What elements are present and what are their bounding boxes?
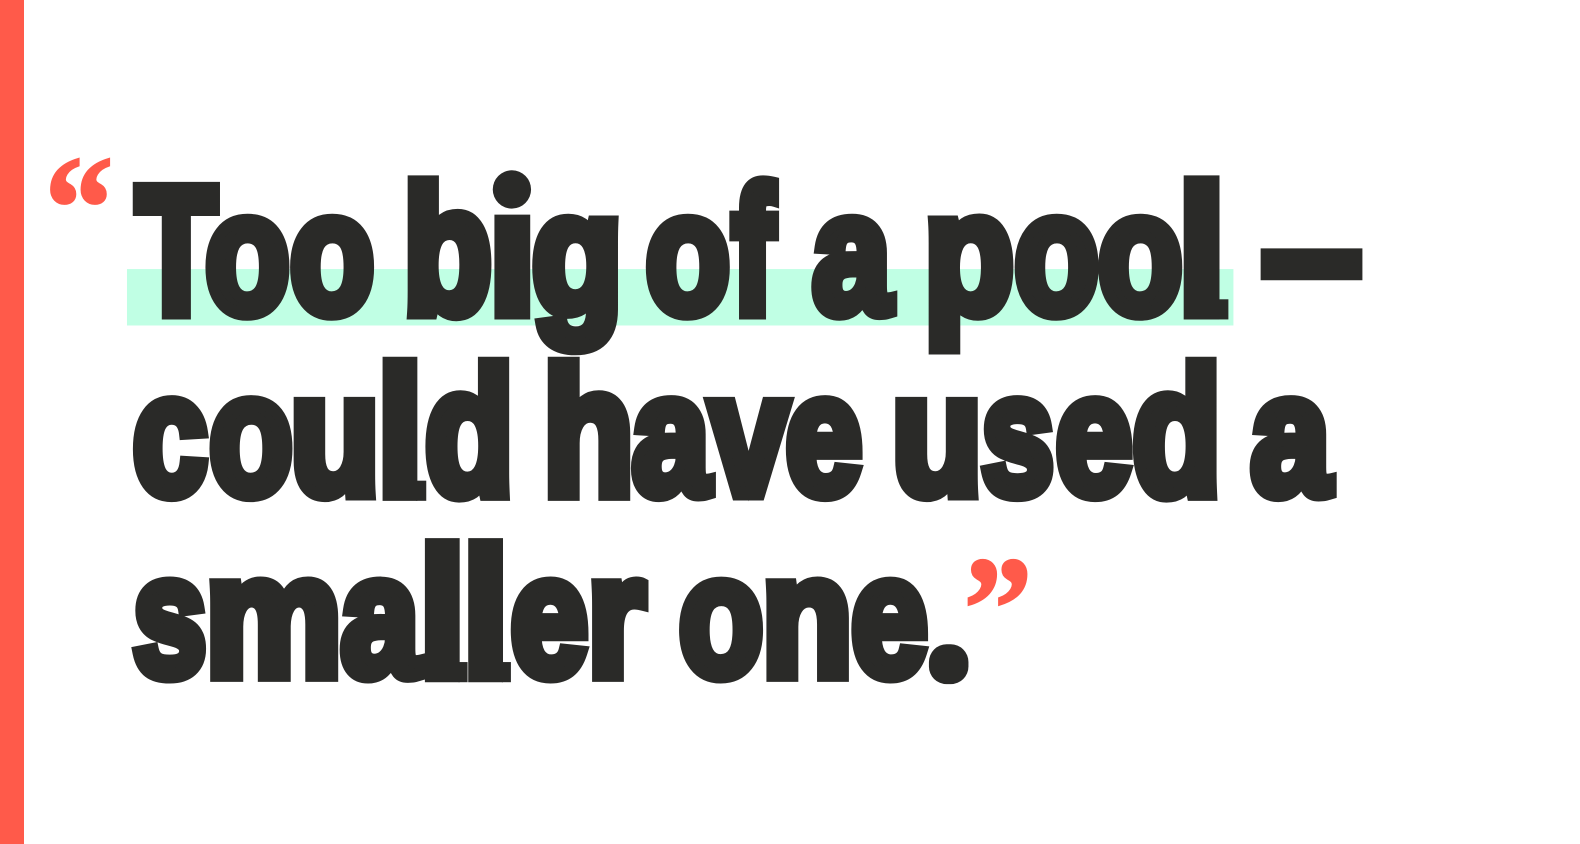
quote line 1: p [924, 158, 1014, 349]
quote line 3: r [588, 521, 645, 712]
quote line 1: o [1098, 158, 1182, 349]
quote line 2: l [378, 333, 422, 533]
quote line 2: e [1056, 339, 1132, 530]
quote line 1: — [1264, 151, 1359, 351]
quote line 1: b [403, 150, 492, 351]
quote line 2: a [1251, 341, 1332, 531]
quote line 3: m [206, 521, 342, 712]
quote line 1: a [813, 158, 892, 350]
quote line 1 [136, 150, 1359, 351]
quote line 1: f [732, 150, 774, 351]
quote line 1: o [290, 158, 374, 349]
quote line 3: o [679, 521, 763, 712]
quote line 1: T [136, 151, 216, 351]
quote line 3: n [762, 520, 852, 712]
quote line 2: c [133, 340, 207, 531]
quote line 3: s [133, 522, 206, 712]
opening quotation mark: “ [44, 126, 114, 291]
quote line 3: l [420, 514, 465, 714]
quote line 1: g [532, 158, 623, 349]
quote line 1: o [205, 158, 289, 349]
quote line 2: u [290, 339, 380, 530]
quote line 2 [133, 331, 1332, 533]
quote line 1: o [1015, 158, 1099, 349]
quote line 3: . [945, 641, 953, 674]
quote line 3: a [341, 521, 420, 712]
quote line 2: e [786, 339, 862, 530]
quote line 3: l [463, 514, 508, 714]
quote line 2: d [1133, 331, 1221, 532]
quote line 1: l [1179, 150, 1225, 351]
quote line 2: u [892, 339, 982, 530]
quote line 2: d [425, 331, 514, 532]
quote line 2: a [632, 339, 711, 530]
highlight band behind first line [127, 269, 1233, 325]
quote line 1: i [489, 150, 535, 351]
quote line 2: o [210, 339, 292, 530]
quote line 2: s [982, 341, 1054, 531]
quote line 2: h [543, 331, 634, 532]
quote line 3: e [851, 521, 927, 712]
left accent bar [0, 0, 24, 844]
quote line 2: v [710, 341, 788, 531]
quote line 3: e [511, 520, 588, 711]
quote block [50, 158, 1362, 684]
quote line 3 [133, 514, 953, 714]
closing quotation mark: ” [963, 528, 1033, 692]
quote line 1: o [646, 158, 730, 349]
